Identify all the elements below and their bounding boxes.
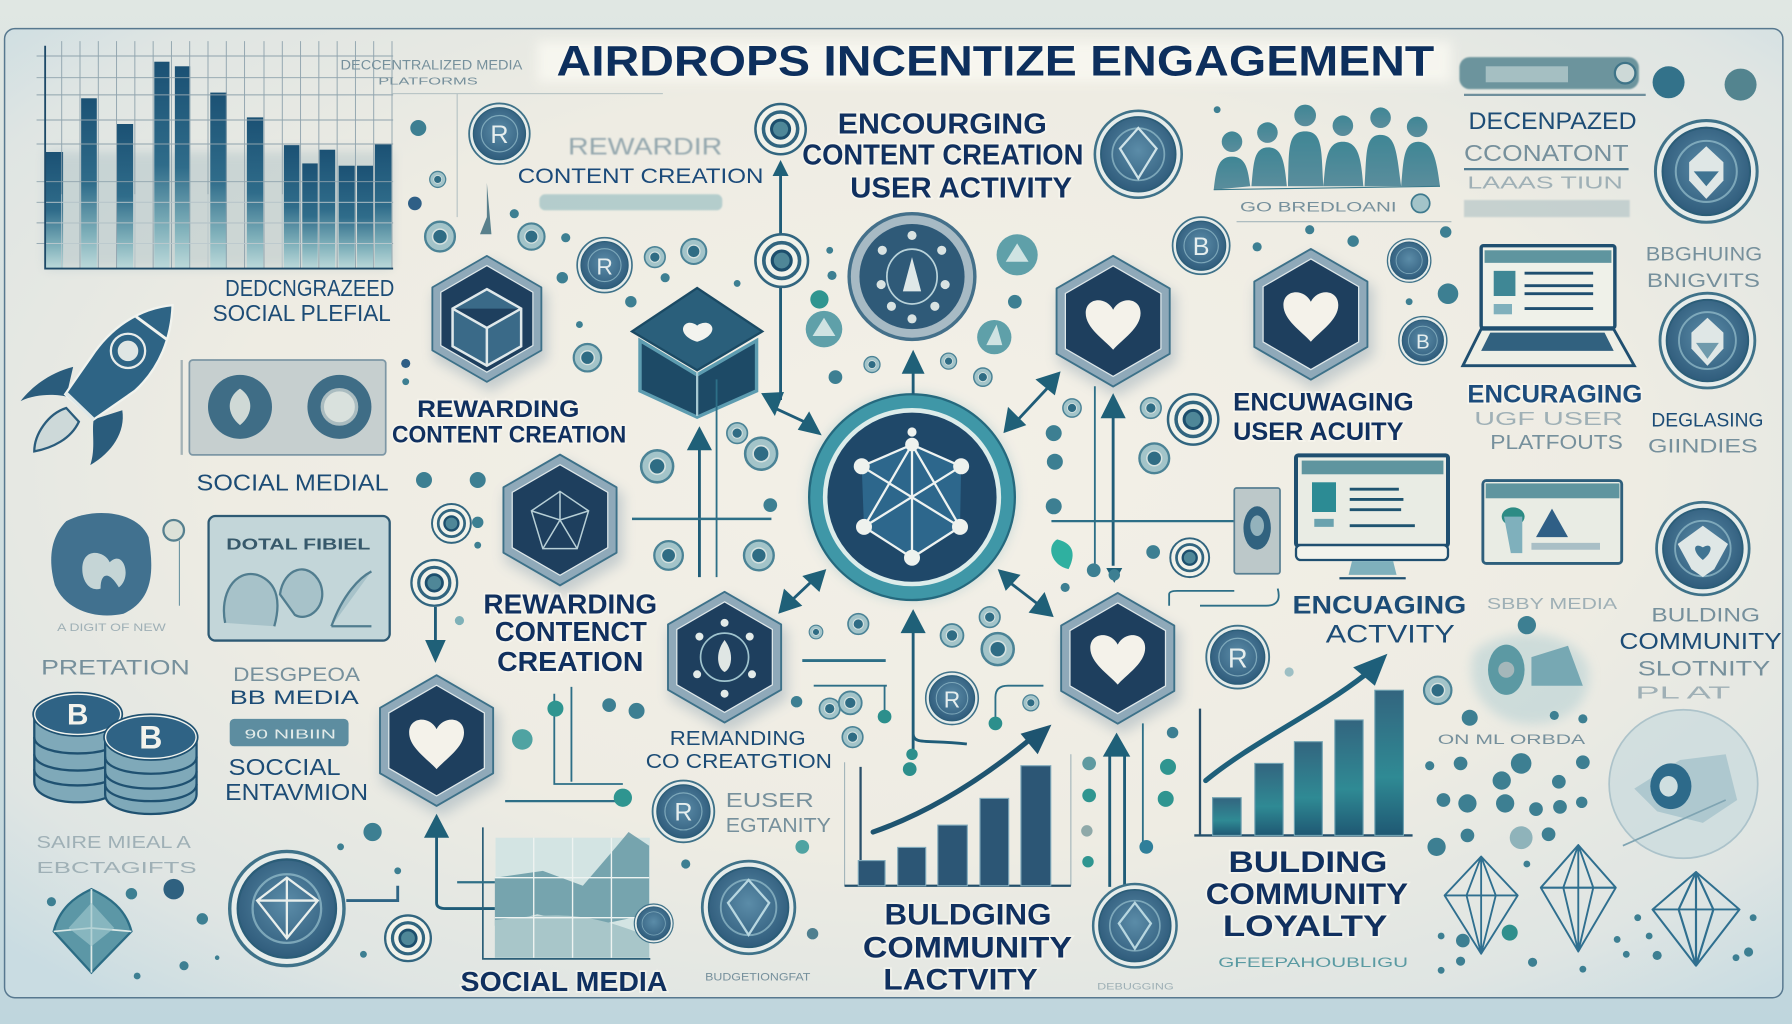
coin: B lower right: R — [1228, 642, 1248, 673]
label: building community platform: PL AT — [1635, 682, 1731, 702]
coin: spiral mid right — [1170, 538, 1209, 577]
label: building community platform: SLOTNITY — [1638, 655, 1770, 680]
label: rewarding content creation top: REWARDIR — [568, 133, 722, 160]
coins and badges: small — [385, 103, 1757, 967]
chart caption — [213, 275, 394, 326]
label: building community activity: BULDGING — [885, 899, 1051, 932]
icon: crystal lower left — [54, 889, 131, 973]
arrow: top left vertical — [773, 160, 789, 400]
box icon with heart — [632, 288, 762, 417]
coin: teal middle — [806, 311, 842, 347]
label: faded media: SBBY MEDIA — [1487, 596, 1618, 613]
label: remanding creation: REMANDING — [670, 727, 806, 750]
label: small bottom captions — [705, 955, 1408, 992]
label: rewarding content creation left: CONTENT CREATION — [392, 421, 626, 448]
label: building community activity — [863, 899, 1072, 997]
caption: faded lower left — [37, 832, 197, 877]
arrows around the hub — [424, 160, 1130, 909]
coin: dark small — [1387, 239, 1431, 282]
label: decentralized top right: LAAAS TIUN — [1467, 173, 1623, 193]
map chart — [457, 827, 650, 959]
label: encouraging activity: ENCUAGING — [1293, 592, 1466, 620]
arrow: lower right — [998, 569, 1054, 617]
label: encouraging user activity: ENCUWAGING — [1233, 388, 1414, 416]
label: building community platform — [1619, 605, 1782, 702]
label: building community loyalty: LOYALTY — [1223, 910, 1388, 943]
label: building community activity: COMMUNITY — [863, 932, 1072, 965]
label: building community platform: BULDING — [1651, 605, 1760, 627]
labels: center — [802, 109, 1083, 205]
label: small bottom captions: GFEEPAHOUBLIGU — [1218, 955, 1408, 970]
coin: teal right — [977, 320, 1011, 354]
labels: center: CONTENT CREATION — [802, 140, 1083, 172]
caption: faded lower left: EBCTAGIFTS — [37, 860, 197, 877]
chart caption: SOCIAL PLEFIAL — [213, 300, 391, 326]
label: user entity: EUSER — [726, 789, 814, 812]
icon: coin stacks: B — [67, 699, 88, 732]
arrow: left vertical — [687, 426, 712, 577]
arrow: up from hub — [902, 350, 925, 394]
label: decentralized top right — [1464, 108, 1637, 217]
text block: lower left social: DESGPEOA — [233, 664, 360, 686]
label: bershuing — [1646, 244, 1762, 292]
coin: R lower center: R — [944, 686, 960, 712]
label: rewarding content creation top — [518, 133, 763, 210]
bar chart: top left — [37, 41, 393, 269]
small heading: top left: PLATFORMS — [378, 77, 478, 88]
label: small bottom captions: BUDGETIONGFAT — [705, 972, 810, 984]
label: rewarding content creation lower — [483, 589, 657, 677]
caption: presentation: PRETATION — [41, 654, 190, 679]
label: encouraging platforms: UGF USER — [1474, 408, 1623, 429]
coin: gem heart right — [1657, 502, 1749, 595]
coin: gem middle right — [1660, 293, 1755, 388]
icon: diamonds — [1445, 845, 1739, 966]
coin: left small — [577, 238, 632, 293]
coin: R top: R — [490, 121, 509, 149]
label: faded row near blob: ON ML ORBDA — [1438, 732, 1586, 747]
panel: media screen — [1483, 481, 1622, 563]
hexagon: heart lower left — [380, 675, 499, 816]
label: small bottom captions: DEBUGGING — [1097, 982, 1174, 992]
coin: spiral right — [1168, 394, 1218, 445]
label: rewarding content creation lower: CREATION — [497, 646, 643, 677]
icon: laptop — [1463, 246, 1634, 366]
arrow: upper left — [761, 392, 822, 435]
label: encouraging user activity — [1233, 388, 1414, 446]
label: rewarding content creation left: REWARDING — [417, 396, 579, 423]
caption: faded lower left: SAIRE MIEAL A — [37, 832, 192, 852]
arrow: lower left — [778, 569, 826, 614]
arrow: up from map — [424, 814, 495, 909]
label: social media bottom: SOCIAL MEDIA — [461, 966, 668, 997]
icon: coin stacks: B — [139, 720, 162, 756]
coin: lower left large — [230, 851, 398, 966]
label: user entity — [726, 789, 831, 837]
icon: phone — [1234, 488, 1280, 574]
icon: community people: GO BREDLOANI — [1240, 199, 1397, 214]
icon: rocket — [21, 305, 173, 465]
coin: spiral lower left — [385, 915, 431, 961]
arrow: upper right — [1003, 371, 1061, 433]
label: rewarding content creation lower: CONTENCT — [495, 616, 647, 647]
icon: monitor — [1296, 455, 1448, 578]
illustration: faded media blob — [1471, 634, 1589, 724]
coin: left small: R — [596, 253, 613, 279]
label: encouraging platforms: PLATFOUTS — [1490, 431, 1623, 454]
panel: digital profile: DOTAL FIBIEL — [226, 537, 371, 554]
hexagon: heart upper middle — [1057, 256, 1176, 397]
coin: lower right of chart — [1093, 884, 1177, 967]
coin: spiral left — [411, 560, 457, 606]
label: decentralized top right: CCONATONT — [1464, 140, 1629, 166]
panel: social icons — [181, 360, 386, 455]
icon: community people — [1214, 105, 1451, 222]
caption: presentation — [41, 622, 190, 679]
text block: lower left social: ENTAVMION — [225, 779, 368, 805]
coin: B lower right — [1206, 626, 1269, 689]
text block: lower left social: BB MEDIA — [230, 687, 359, 709]
caption: presentation: A DIGIT OF NEW — [57, 622, 166, 634]
label: remanding creation — [646, 727, 832, 773]
arrow: double stem bottom right — [1103, 733, 1130, 887]
hexagon: cube — [432, 256, 547, 392]
bar chart: community loyalty — [1194, 654, 1413, 835]
label: bershuing: BBGHUING — [1646, 244, 1762, 266]
coin: large network top — [849, 214, 975, 339]
icon: coin stacks — [33, 693, 198, 814]
label: decentralized top right: DECENPAZED — [1469, 108, 1637, 135]
coin: B right of heart — [1399, 317, 1447, 365]
small heading: top left — [341, 58, 663, 217]
coin: small near map — [634, 904, 673, 943]
label: building community loyalty: COMMUNITY — [1206, 878, 1408, 911]
arrow: down lower left — [425, 607, 446, 663]
bar chart: community activity — [845, 725, 1071, 886]
coin: spiral top — [755, 104, 806, 154]
label: degrasing — [1648, 409, 1763, 458]
hexagon: heart lower right — [1061, 593, 1181, 734]
label: degrasing: GIINDIES — [1648, 436, 1758, 458]
coin: gem top right — [1655, 121, 1757, 222]
small heading: top left: DECCENTRALIZED MEDIA — [341, 58, 523, 73]
label: rewarding content creation lower: REWARDING — [483, 589, 657, 620]
coin: teal B: B — [1193, 233, 1210, 261]
labels: center: USER ACTIVITY — [850, 173, 1072, 205]
arrow: right vertical — [1101, 393, 1126, 583]
label: encouraging platforms: ENCURAGING — [1467, 380, 1642, 408]
title: AIRDROPS INCENTIZE ENGAGEMENT — [557, 37, 1434, 84]
label: social media: SOCIAL MEDIAL — [197, 469, 389, 495]
label: user entity: EGTANITY — [726, 814, 831, 837]
text block: lower left social: 90 NIBIIN — [245, 727, 336, 741]
label: encouraging platforms — [1467, 380, 1642, 454]
coin: top middle right — [1095, 111, 1182, 198]
coin: lower center large — [702, 861, 795, 954]
label: degrasing: DEGLASING — [1651, 409, 1763, 431]
label: building community loyalty — [1206, 846, 1408, 943]
label: bershuing: BNIGVITS — [1647, 270, 1760, 292]
coin: B right of heart: B — [1416, 331, 1430, 354]
label: rewarding content creation left — [392, 396, 626, 448]
hexagon: network left — [503, 455, 623, 595]
label: building community platform: COMMUNITY — [1619, 628, 1782, 654]
hexagon: heart upper right — [1254, 249, 1374, 390]
coin: teal B — [1173, 217, 1230, 274]
illustration: faded camera circle — [1609, 710, 1758, 858]
coin: teal top — [997, 234, 1038, 275]
coin: R top — [469, 103, 530, 164]
label: encouraging activity — [1293, 592, 1466, 648]
banner: top right — [1459, 57, 1757, 101]
label: building community activity: LACTVITY — [883, 964, 1038, 997]
label: encouraging user activity: USER ACUITY — [1233, 418, 1404, 446]
icon: pouch — [51, 513, 184, 615]
text block: lower left social: SOCCIAL — [229, 754, 341, 780]
label: encouraging activity: ACTVITY — [1326, 620, 1455, 648]
label: remanding creation: CO CREATGTION — [646, 750, 832, 773]
coin: lower center left: R — [674, 799, 693, 827]
connector lines — [505, 379, 1279, 846]
coin: small left of hexagon — [432, 504, 471, 543]
labels: center: ENCOURGING — [838, 109, 1047, 141]
label: building community loyalty: BULDING — [1229, 846, 1387, 879]
label: rewarding content creation top: CONTENT CREATION — [518, 163, 763, 188]
central hub — [807, 392, 1017, 602]
chart caption: DEDCNGRAZEED — [225, 275, 394, 301]
hexagon: network lower — [668, 592, 787, 733]
arrow: up from bottom — [901, 609, 967, 754]
coin: spiral second — [755, 234, 808, 287]
coin: lower center left — [653, 781, 714, 842]
text block: lower left social — [225, 664, 368, 805]
panel: digital profile — [209, 516, 390, 641]
coin: R lower center — [926, 672, 978, 725]
